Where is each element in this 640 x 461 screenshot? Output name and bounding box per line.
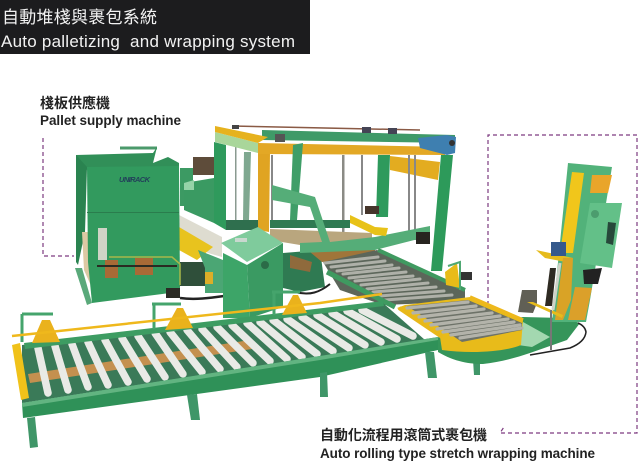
label: wrapping machine: Auto rolling type stretch wrapping machine [320,446,595,461]
centre roller conveyor [323,250,472,307]
palletizer rear frame [232,125,455,240]
stretch wrapping machine tower [518,163,622,350]
title banner: Auto palletizing and wrapping system [1,32,295,51]
palletizer lifting frame [214,126,456,271]
main roller conveyor [12,301,438,418]
dashed leader: pallet supply machine [43,138,74,256]
central control box [221,227,283,318]
brand logo: UNIRACK [119,175,151,184]
title banner [0,0,310,54]
label: pallet supply machine: Pallet supply machine [40,113,181,128]
palletizer deck [226,220,375,294]
pallet supply machine [75,147,180,305]
label: wrapping machine: 自動化流程用滾筒式裹包機 [320,427,487,443]
label: pallet supply machine: 棧板供應機 [40,95,110,111]
label: wrapping machine [320,427,595,461]
rotary turntable [397,297,586,364]
conveyor legs [27,352,480,448]
label: pallet supply machine [40,95,181,128]
dashed frame: wrapping machine [488,135,637,433]
conveyor rollers [38,310,413,393]
pallet feed section [179,157,224,299]
yellow guard rail [12,292,382,343]
title banner: 自動堆棧與裹包系統 [2,8,157,27]
